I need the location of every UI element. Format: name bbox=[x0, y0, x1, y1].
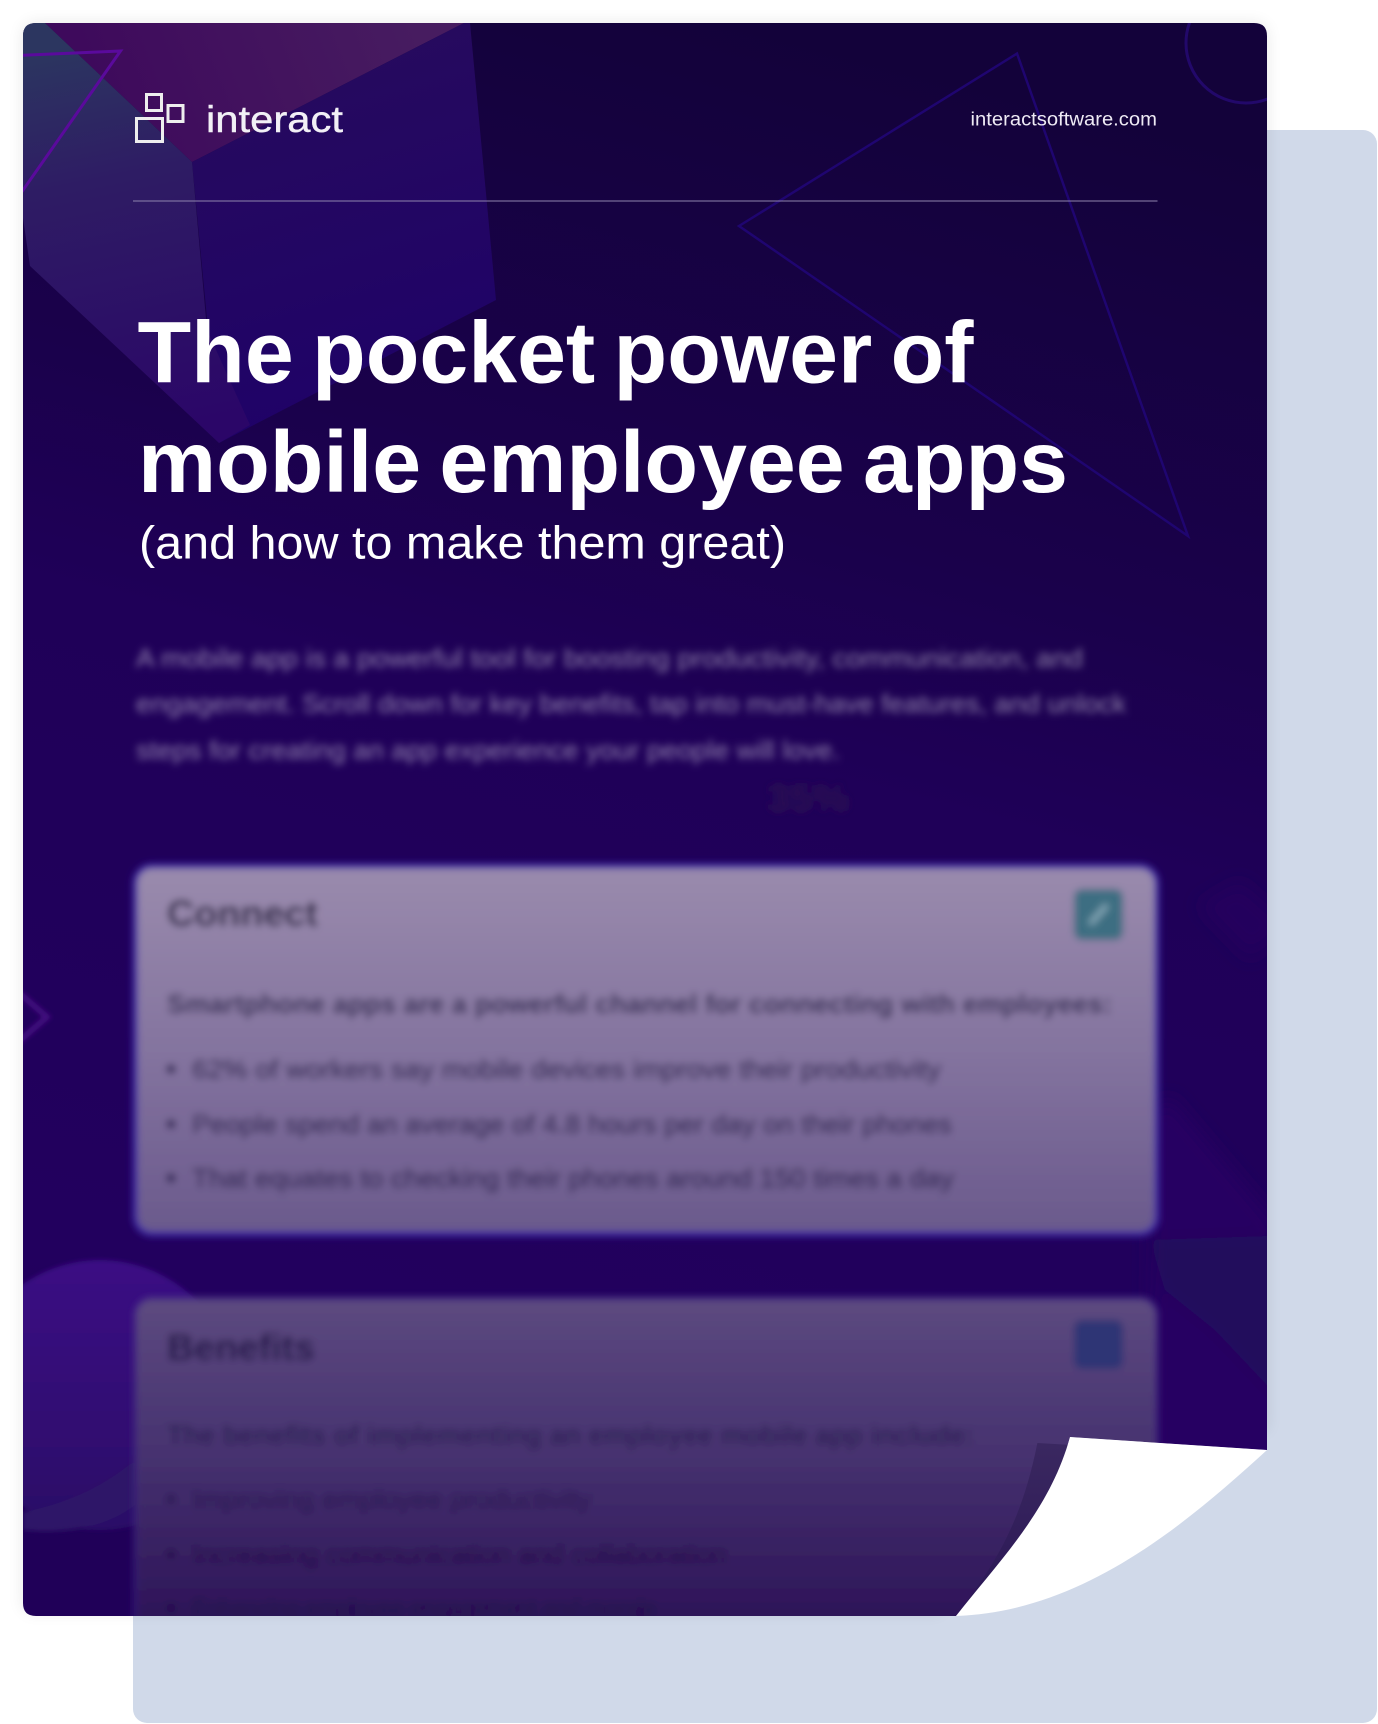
decorative shape: magenta polygon bbox=[45, 23, 464, 162]
title: The pocket power of bbox=[138, 305, 975, 402]
logo mark: top square bbox=[146, 94, 162, 110]
logo mark: right square bbox=[168, 106, 183, 122]
decorative shape: left chevron bbox=[10, 985, 47, 1049]
logo bbox=[136, 94, 183, 142]
list: connect bullets: People spend an average of 4.8 hours per day on their phones bbox=[192, 1109, 952, 1139]
icon: benefits bbox=[1074, 1320, 1123, 1369]
decorative shape: right purple polygon bbox=[1154, 1126, 1267, 1450]
list: benefits bullets: Increasing communication and collaboration bbox=[192, 1539, 727, 1569]
decorative shape: blue polygon bbox=[192, 23, 496, 443]
decorative shape: purple outline triangle bbox=[23, 49, 124, 192]
list: benefits bullets: Improving employee productivity bbox=[192, 1484, 591, 1514]
list: connect bullets bbox=[166, 1054, 954, 1193]
page curl bbox=[956, 1437, 1267, 1616]
list: connect bullets: That equates to checking their phones around 150 times a day bbox=[192, 1163, 954, 1193]
blurred right side shapes bbox=[1154, 1126, 1267, 1450]
list: benefits bullets bbox=[167, 1494, 716, 1616]
heading: connect: Connect bbox=[167, 893, 318, 934]
text: connect intro: Smartphone apps are a powerful channel for connecting with employees: bbox=[167, 989, 1112, 1019]
decorative shape: left polygon bbox=[23, 23, 250, 443]
list: connect bullets: 62% of workers say mobile devices improve their productivity bbox=[192, 1054, 941, 1084]
subtitle: (and how to make them great) bbox=[139, 517, 786, 569]
decorative shape: outline circle bbox=[1184, 23, 1267, 104]
intro text: A mobile app is a powerful tool for boosting productivity, communication, and bbox=[136, 643, 1083, 673]
intro text bbox=[136, 643, 1127, 765]
panel: connect bbox=[135, 866, 1157, 1234]
decorative shape: right slate polygon bbox=[1154, 1236, 1267, 1385]
decorative shape: lower left overlay bbox=[23, 1460, 135, 1531]
icon: connect bbox=[1074, 889, 1123, 940]
decorative shape: lower left circle bbox=[23, 1258, 193, 1530]
blurred content bbox=[135, 643, 1157, 1718]
decorative shape: large outline triangle bbox=[739, 54, 1188, 536]
title: mobile employee apps bbox=[138, 414, 1068, 511]
statistic: 35% bbox=[767, 778, 849, 820]
divider bbox=[133, 200, 1158, 202]
panel: benefits bbox=[131, 1294, 1256, 1616]
decorative shape: right faint diamond bbox=[1197, 880, 1290, 960]
list: benefits bullets: Enhancing employee engagement and morale bbox=[192, 1593, 656, 1623]
text: benefits intro: The benefits of implementing an employee mobile app include: bbox=[167, 1420, 974, 1450]
blurred lower left shapes bbox=[23, 990, 193, 1533]
heading: benefits: Benefits bbox=[167, 1327, 315, 1368]
intro text: engagement. Scroll down for key benefits, tap into must-have features, and unlock bbox=[136, 688, 1127, 718]
page curl shadow bbox=[956, 1443, 1072, 1616]
logo wordmark: interact bbox=[206, 99, 344, 140]
intro text: steps for creating an app experience your people will love. bbox=[136, 735, 840, 765]
website link: interactsoftware.com bbox=[970, 110, 1157, 130]
logo mark: large square bbox=[136, 118, 162, 142]
title bbox=[138, 305, 1068, 511]
